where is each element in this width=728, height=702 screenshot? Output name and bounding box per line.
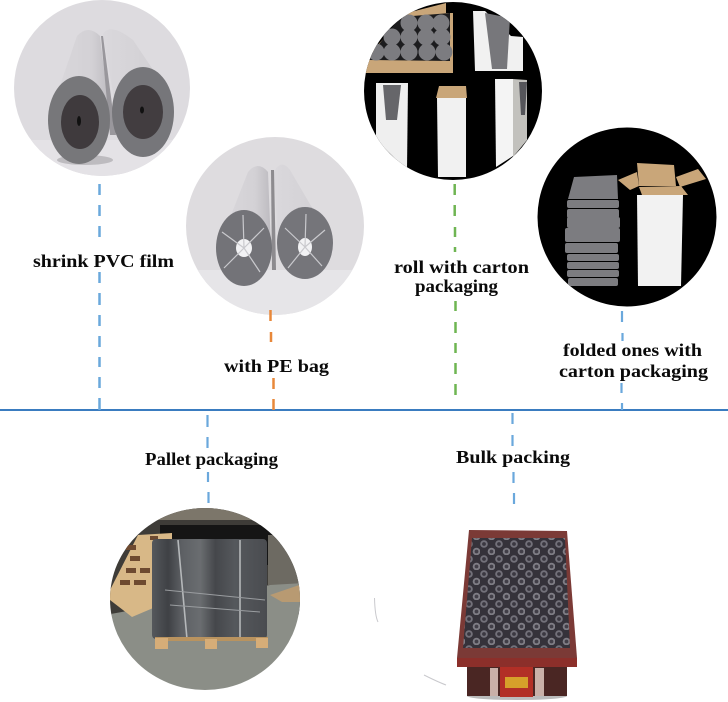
connector: bulk packing — [512, 413, 514, 504]
container frame — [457, 530, 577, 658]
photo: rolls with PE bag — [186, 137, 364, 315]
label: folded ones with carton packaging: carton packaging — [559, 361, 708, 381]
label: with PE bag: with PE bag — [224, 356, 329, 376]
label: roll with carton packaging — [394, 257, 529, 296]
wooden pallet base — [155, 637, 268, 641]
connector: pallet packaging — [208, 415, 209, 503]
carton top right — [473, 11, 523, 71]
carton center — [437, 98, 466, 177]
label: roll with carton packaging: roll with carton — [394, 257, 529, 277]
label: shrink PVC film: shrink PVC film — [33, 251, 174, 271]
label: folded ones with carton packaging: folded ones with — [563, 340, 702, 360]
photo: roll cartons — [364, 2, 542, 180]
truck rear — [457, 658, 577, 667]
connector: shrink PVC film — [98, 184, 101, 410]
main horizontal timeline — [0, 409, 728, 411]
photo: folded ones with carton — [537, 127, 717, 307]
carton bottom left — [376, 83, 408, 170]
label: roll with carton packaging: packaging — [415, 276, 498, 296]
stacked bags — [565, 175, 620, 286]
photo: bulk packing container truck — [374, 530, 577, 700]
connector: roll with carton — [453, 184, 457, 395]
stacked wooden pallets — [110, 533, 172, 617]
carton right — [495, 79, 513, 167]
label: pallet packaging: Pallet packaging — [145, 449, 278, 469]
wrapped roll block — [152, 539, 267, 639]
connector: with PE bag — [270, 310, 274, 410]
cardboard tray — [364, 3, 453, 73]
ground shadow — [467, 692, 567, 700]
roll ends — [463, 538, 570, 648]
photo: pallet packaging — [110, 508, 300, 690]
connector: folded ones with carton — [622, 311, 623, 410]
label: bulk packing: Bulk packing — [456, 447, 570, 467]
photo: rolls in shrink PVC film — [14, 0, 190, 180]
label: folded ones with carton packaging — [559, 340, 708, 381]
